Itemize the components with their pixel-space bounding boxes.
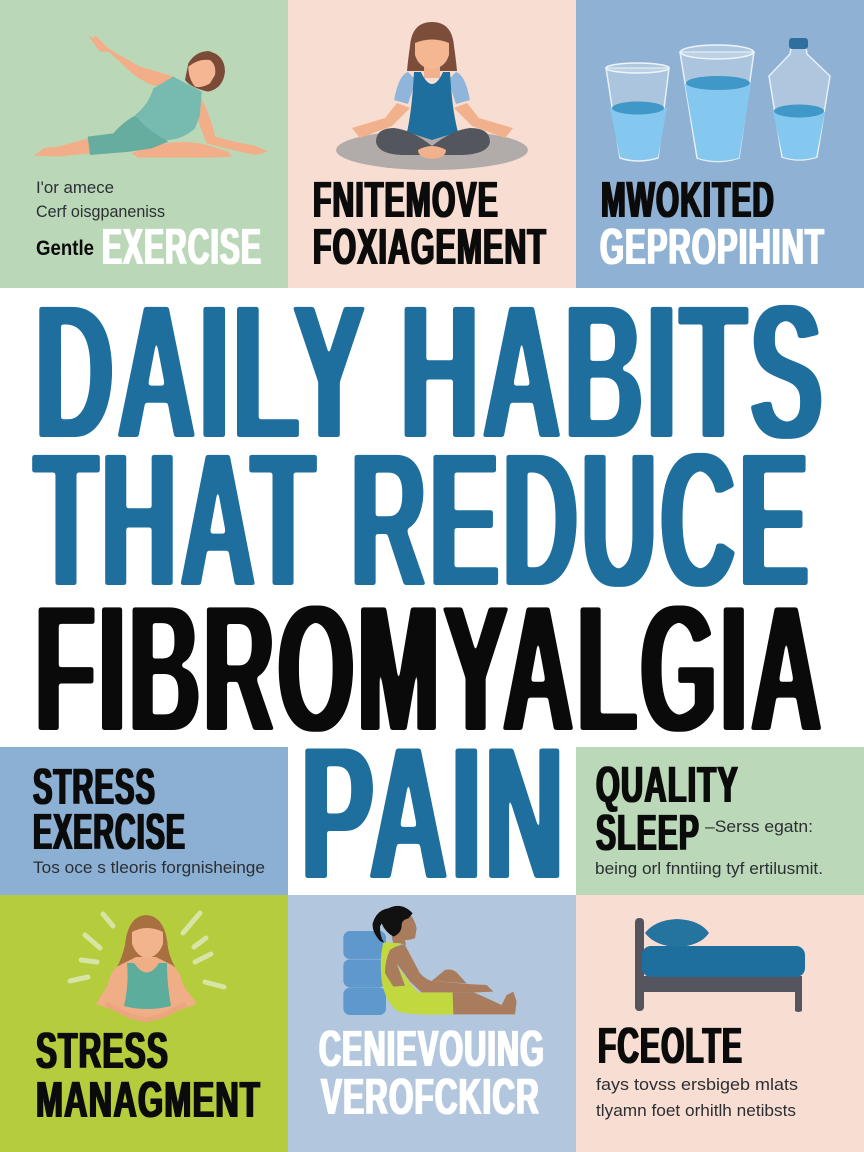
heading: stretching: VEROFCKICR — [321, 1068, 540, 1125]
heading: stress exercise — [33, 758, 186, 860]
main title: PAIN — [301, 705, 567, 922]
captions: –Serss egatn: — [705, 817, 813, 836]
heading: movement — [313, 171, 547, 275]
heading: stress exercise: EXERCISE — [33, 803, 186, 860]
icon: woman meditating — [336, 22, 528, 170]
captions — [595, 817, 823, 878]
icon: tall glass of water — [680, 45, 754, 162]
icon: water bottle — [769, 38, 830, 160]
label: gentle: Gentle — [36, 237, 94, 260]
heading: stress exercise: STRESS — [33, 758, 156, 815]
caption: Tos oce s tleoris forgnisheinge — [33, 858, 265, 877]
heading: stress management: MANAGMENT — [36, 1071, 261, 1128]
panel: stretching — [288, 895, 576, 1152]
panel: stress management — [0, 895, 288, 1152]
panel: sleep routine — [576, 895, 864, 1152]
small caption: Cerf oisgpaneniss — [36, 202, 165, 221]
panel: hydration — [576, 0, 864, 288]
heading: quality sleep: SLEEP — [596, 804, 700, 861]
heading: quality sleep — [596, 756, 739, 861]
caption — [596, 1075, 798, 1120]
caption: fays tovss ersbigeb mlats — [596, 1075, 798, 1094]
panel: gentle exercise — [0, 0, 288, 288]
heading: stretching — [319, 1020, 545, 1125]
heading: movement: FNITEMOVE — [313, 171, 499, 228]
panel: stress exercise — [0, 747, 288, 895]
captions: being orl fnntiing tyf ertilusmit. — [595, 859, 823, 878]
panel: quality sleep — [576, 747, 864, 895]
heading: quality sleep: QUALITY — [596, 756, 739, 813]
heading: hydration — [600, 171, 825, 275]
icon: woman sitting against cushions — [343, 906, 517, 1015]
heading: stress management — [36, 1022, 261, 1128]
heading: movement: FOXIAGEMENT — [313, 218, 547, 275]
panel: movement — [288, 0, 576, 288]
small caption: I'or amece — [36, 178, 114, 197]
heading: stretching: CENIEVOUING — [319, 1020, 545, 1077]
icon: glass of water — [606, 63, 669, 161]
icon: woman in side stretch — [33, 35, 268, 158]
small caption — [36, 178, 165, 221]
caption: tlyamn foet orhitlh netibsts — [596, 1101, 796, 1120]
heading: FCEOLTE — [598, 1017, 743, 1074]
main title — [34, 263, 826, 922]
heading: exercise: EXERCISE — [102, 218, 262, 275]
icon: bed — [635, 918, 805, 1012]
icon: calm woman with rays — [70, 913, 224, 1020]
heading: stress management: STRESS — [36, 1022, 169, 1079]
